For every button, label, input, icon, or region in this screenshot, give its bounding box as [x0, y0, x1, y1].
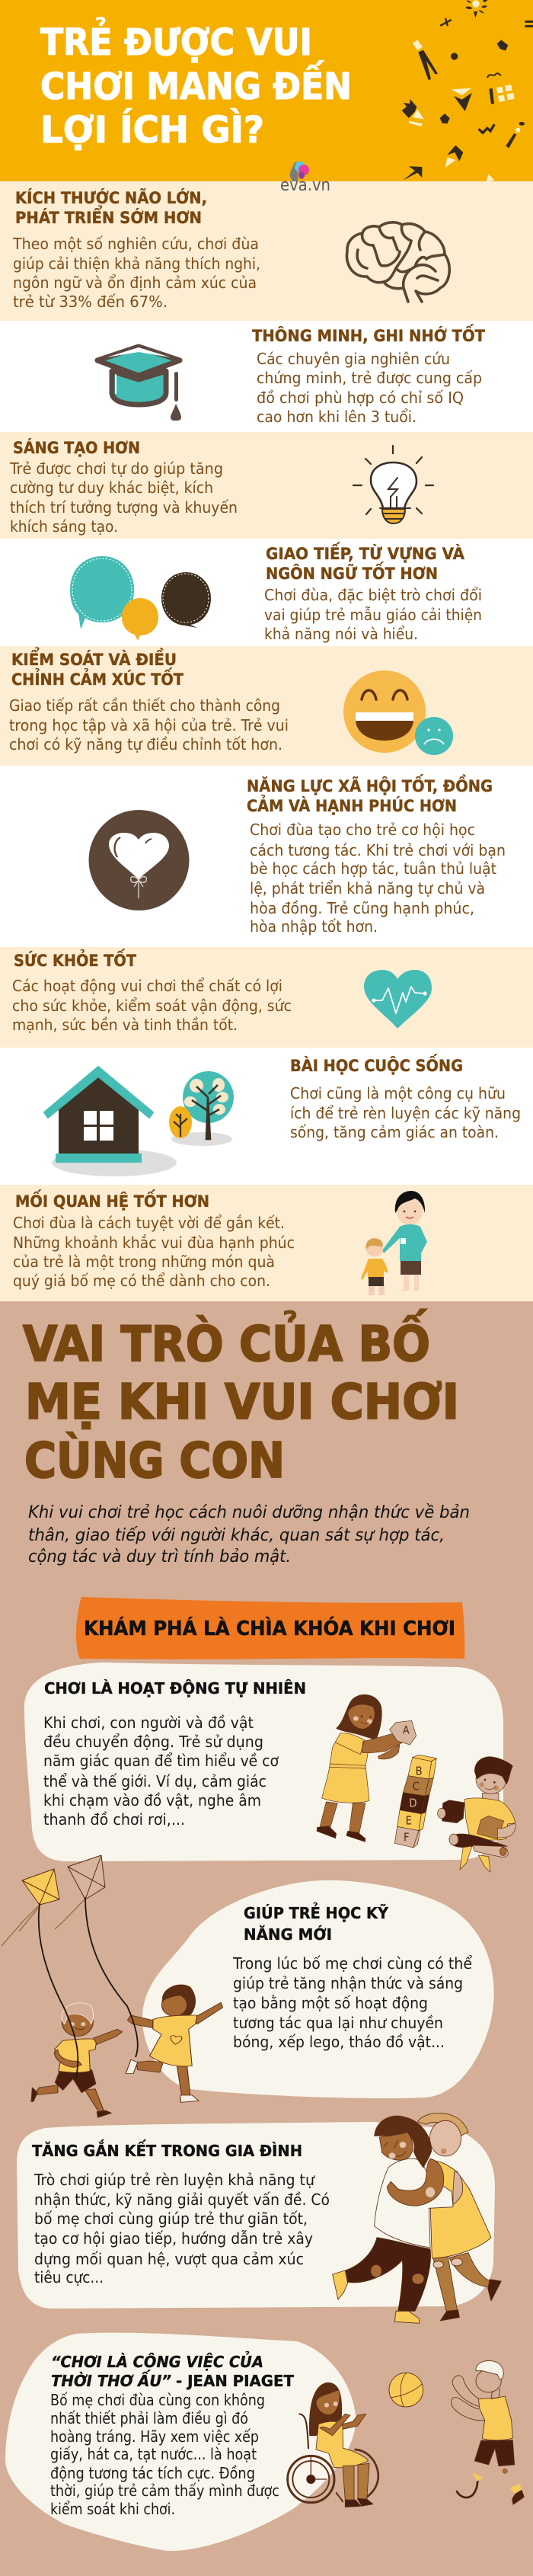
text: social body: lệ, phát triển khả năng tự chủ và [250, 879, 485, 898]
text: brain size body: ngôn ngữ và ổn định cảm xúc của [13, 274, 257, 292]
text: social body: cách tương tác. Khi trẻ chơi với bạn [250, 841, 506, 859]
block letters [403, 1725, 490, 1845]
heading: Piaget quote: - JEAN PIAGET [176, 2372, 294, 2390]
text: life lessons body: Chơi cũng là một công cụ hữu [290, 1084, 506, 1102]
logo: eva.vn: eva.vn [280, 176, 330, 195]
text: new skills body [232, 1954, 473, 2051]
heading: communication [266, 542, 464, 583]
logo: eva.vn [280, 162, 330, 195]
text: new skills body: tạo bằng một số hoạt động [233, 1994, 428, 2012]
text: intro paragraph [28, 1503, 470, 1566]
block letters: F [404, 1832, 410, 1845]
title: LỢI ÍCH GÌ? [40, 108, 264, 152]
text: Piaget body [50, 2391, 279, 2518]
heading: role of parents: CÙNG CON [24, 1432, 285, 1490]
heading: life lessons: BÀI HỌC CUỘC SỐNG [290, 1054, 463, 1075]
text: social body: hòa nhập tốt hơn. [250, 917, 378, 936]
heading: emotions: CHỈNH CẢM XÚC TỐT [11, 667, 184, 689]
heading: creative: SÁNG TẠO HƠN [13, 438, 140, 457]
text: creative body: cường tư duy khác biệt, kích [10, 478, 213, 497]
heading: communication: GIAO TIẾP, TỪ VỰNG VÀ [266, 542, 464, 563]
heading: Piaget quote: THỜI THƠ ẤU” [51, 2369, 171, 2390]
heading: health: SỨC KHỎE TỐT [14, 949, 136, 970]
text: Piaget body: giấy, hát ca, tạt nước... là hoạt [50, 2445, 257, 2463]
heading: role of parents: VAI TRÒ CỦA BỐ [23, 1309, 430, 1373]
panel: more creative [0, 432, 533, 539]
text: creative body: Trẻ được chơi tự do giúp tăng [9, 459, 223, 478]
text: family bonding body: nhận thức, kỹ năng giải quyết vấn đề. Có [34, 2190, 330, 2209]
text: Piaget body: động tương tác tích cực. Đồng [50, 2464, 255, 2482]
text: new skills body: bóng, xếp lego, tháo đồ vật... [233, 2033, 445, 2051]
card: learning new skills [142, 1880, 494, 2098]
heading: role of parents: MẸ KHI VUI CHƠI [25, 1374, 459, 1431]
banner: exploration is key: KHÁM PHÁ LÀ CHÌA KHÓA KHI CHƠI [84, 1617, 455, 1640]
text: creative body: khích sáng tạo. [10, 517, 118, 536]
text: Piaget body: Bố mẹ chơi đùa cùng con không [50, 2391, 265, 2409]
text: relationships body: Những khoảnh khắc vui đùa hạnh phúc [13, 1234, 295, 1252]
heading: new skills: GIÚP TRẺ HỌC KỸ [244, 1902, 389, 1922]
heading: brain size: KÍCH THƯỚC NÃO LỚN, [15, 188, 207, 207]
kite strings [39, 1897, 138, 2078]
block letters: C [413, 1780, 420, 1793]
text: smart body [257, 350, 482, 426]
panel: good health [0, 947, 533, 1048]
text: intro paragraph: cộng tác và duy trì tính bảo mật. [28, 1547, 291, 1566]
block letters: B [416, 1765, 423, 1778]
text: emotions body: chơi có kỹ năng tự điều chỉnh tốt hơn. [9, 735, 282, 754]
heading: social: NĂNG LỰC XÃ HỘI TỐT, ĐỒNG [247, 774, 493, 795]
text: Piaget body: kiểm soát khi chơi. [50, 2500, 175, 2518]
text: social body [250, 821, 506, 936]
card: Piaget quote [5, 2333, 356, 2551]
text: new skills body: giúp trẻ tăng nhận thức và sáng [233, 1974, 463, 1992]
text: communication body: vai giúp trẻ mẫu giáo cải thiện [264, 605, 482, 624]
panel: life lessons [0, 1048, 533, 1185]
text: social body: bè học cách hợp tác, tuân thủ luật [250, 859, 496, 878]
block letters: A [403, 1725, 410, 1737]
heading: Piaget quote: “CHƠI LÀ CÔNG VIỆC CỦA [51, 2350, 263, 2371]
text: smart body: Các chuyên gia nghiên cứu [257, 350, 450, 368]
icon: parent and child [361, 1191, 427, 1295]
illustration: children hugging [333, 2113, 501, 2323]
text: Piaget body: nhất thiết phải làm điều gì đó [50, 2409, 248, 2427]
text: natural activity body: năm giác quan để tìm hiểu về cơ [43, 1752, 279, 1770]
text: emotions body: Giao tiếp rất cần thiết cho thành công [9, 696, 280, 715]
panel: communication and language [0, 539, 533, 646]
block letters: E [406, 1814, 412, 1827]
icon: light bulb [353, 446, 433, 523]
block letters: G [483, 1824, 490, 1837]
panel: smart, good memory [0, 321, 533, 432]
title: TRẺ ĐƯỢC VUI [40, 17, 312, 64]
heading: new skills [244, 1902, 389, 1944]
icon: scattered doodle shapes [402, 0, 533, 182]
text: family bonding body: Trò chơi giúp trẻ rèn luyện khả năng tự [34, 2171, 315, 2189]
text: smart body: cao hơn khi lên 3 tuổi. [257, 408, 417, 426]
heading: brain size: PHÁT TRIỂN SỚM HƠN [15, 206, 202, 227]
text: Piaget body: hoàng tráng. Hãy xem việc xếp [50, 2427, 259, 2446]
heading: natural activity: CHƠI LÀ HOẠT ĐỘNG TỰ NHIÊN [44, 1678, 306, 1698]
text: social body: Chơi đùa tạo cho trẻ cơ hội học [250, 821, 475, 839]
text: emotions body: trong học tập và xã hội của trẻ. Trẻ vui [9, 716, 289, 734]
panel: header [0, 0, 533, 182]
heading: brain size [15, 188, 207, 227]
text: new skills body: Trong lúc bố mẹ chơi cùng có thể [232, 1954, 473, 1973]
icon: laughing and sad faces [343, 670, 453, 755]
text: family bonding body: dựng mối quan hệ, vượt qua cảm xúc [34, 2250, 304, 2268]
heading: new skills: NĂNG MỚI [244, 1925, 332, 1944]
text: relationships body: quý giá bố mẹ có thể dành cho con. [13, 1272, 270, 1290]
text: family bonding body: tạo cơ hội giao tiếp, hướng dẫn trẻ xây [34, 2229, 313, 2248]
text: natural activity body: Khi chơi, con người và đồ vật [43, 1714, 254, 1732]
text: creative body [9, 459, 238, 536]
text: intro paragraph: thân, giao tiếp với người khác, quan sát sự hợp tác, [28, 1526, 445, 1545]
text: life lessons body: ích để trẻ rèn luyện các kỹ năng [290, 1104, 521, 1122]
text: family bonding body: tiêu cực... [34, 2268, 104, 2286]
heading: Piaget quote [51, 2350, 294, 2390]
illustration: children stacking blocks [317, 1694, 515, 1872]
illustration: children flying kites [2, 1855, 222, 2117]
card: family bonding [17, 2113, 501, 2323]
panel: social skills [0, 766, 533, 947]
text: brain size body [12, 235, 260, 311]
text: relationships body [13, 1214, 295, 1290]
icon: speech bubbles [70, 556, 211, 641]
title [40, 17, 352, 152]
heading: family bonding: TĂNG GẮN KẾT TRONG GIA ĐÌNH [32, 2139, 302, 2160]
text: smart body: chứng minh, trẻ được cung cấp [257, 369, 482, 387]
text: health body: cho sức khỏe, kiểm soát vận động, sức [12, 997, 292, 1015]
icon: heart with pulse line [364, 970, 432, 1029]
kites [2, 1855, 105, 1946]
icon: house and trees [44, 1067, 234, 1176]
banner: exploration is key [76, 1597, 464, 1659]
text: relationships body: của trẻ là một trong những món quà [13, 1253, 275, 1271]
text: new skills body: tương tác qua lại như chuyền [233, 2014, 443, 2032]
block letters: H [446, 1810, 453, 1821]
heading: emotions: KIỂM SOÁT VÀ ĐIỀU [11, 648, 177, 669]
text: communication body [264, 586, 482, 643]
title: CHƠI MANG ĐẾN [40, 60, 352, 108]
text: brain size body: Theo một số nghiên cứu, chơi đùa [12, 235, 259, 253]
heading: social: CẢM VÀ HẠNH PHÚC HƠN [247, 795, 457, 815]
text: brain size body: giúp cải thiện khả năng thích nghi, [13, 254, 260, 273]
text: relationships body: Chơi đùa là cách tuyệt vời để gắn kết. [13, 1214, 285, 1232]
text: natural activity body: đều chuyển động. Trẻ sử dụng [43, 1733, 263, 1751]
text: communication body: khả năng nói và hiểu. [264, 625, 418, 643]
icon: graduation cap [97, 347, 181, 421]
text: social body: hòa đồng. Trẻ cũng hạnh phúc, [250, 899, 474, 917]
panel: better relationships [0, 1185, 533, 1301]
heading: relationships: MỐI QUAN HỆ TỐT HƠN [15, 1189, 209, 1211]
text: family bonding body [34, 2171, 330, 2286]
text: life lessons body: sống, tăng cảm giác an toàn. [290, 1123, 499, 1141]
text: natural activity body: thể và thế giới. Ví dụ, cảm giác [43, 1772, 266, 1790]
text: brain size body: trẻ từ 33% đến 67%. [13, 293, 168, 311]
text: Piaget body: thời, giúp trẻ cảm thấy mình được [50, 2482, 279, 2500]
text: emotions body [9, 696, 289, 754]
heading: smart: THÔNG MINH, GHI NHỚ TỐT [252, 324, 485, 345]
text: health body: Các hoạt động vui chơi thể chất có lợi [12, 977, 282, 995]
text: natural activity body: khi chạm vào đồ vật, nghe âm [43, 1791, 261, 1810]
text: family bonding body: bố mẹ chơi cùng giúp trẻ thư giãn tốt, [34, 2210, 308, 2228]
text: intro paragraph: Khi vui chơi trẻ học cách nuôi dưỡng nhận thức về bản [28, 1503, 470, 1522]
text: life lessons body [290, 1084, 521, 1141]
illustration: ball game with wheelchair [288, 2360, 524, 2507]
text: natural activity body: thanh đồ chơi rơi,... [43, 1810, 185, 1829]
panel: parents' role background [0, 1301, 533, 2576]
heading: emotions [11, 648, 184, 689]
card: play is natural [24, 1662, 515, 1872]
icon: heart balloon [88, 810, 189, 910]
text: smart body: đồ chơi phù hợp có chỉ số IQ [257, 389, 464, 407]
panel: larger brain [0, 181, 533, 321]
block letters: D [409, 1797, 417, 1810]
icon: brain [346, 222, 449, 302]
text: communication body: Chơi đùa, đặc biệt trò chơi đổi [264, 586, 482, 604]
text: health body: mạnh, sức bền và tinh thần tốt. [12, 1016, 238, 1034]
panel: emotional regulation [0, 646, 533, 766]
text: creative body: thích trí tưởng tượng và khuyến [10, 498, 238, 517]
heading: social [247, 774, 493, 815]
heading: communication: NGÔN NGỮ TỐT HƠN [266, 562, 438, 583]
text: health body [12, 977, 292, 1034]
text: natural activity body [43, 1714, 279, 1829]
children [31, 1985, 222, 2117]
heading: role of parents [23, 1309, 459, 1490]
